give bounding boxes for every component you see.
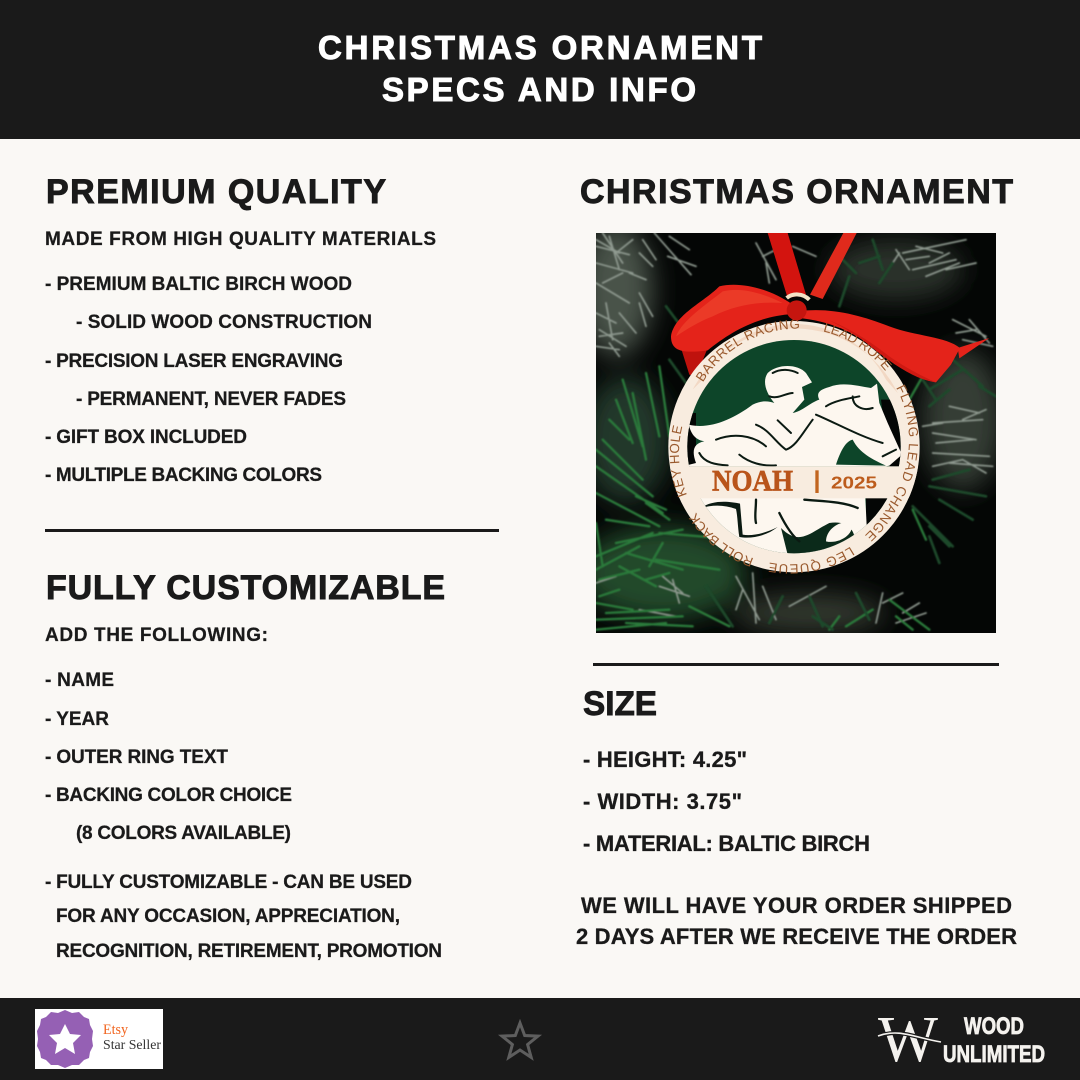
text block: occasions: - FULLY CUSTOMIZABLE - CAN BE USED: [45, 872, 412, 893]
heading: size: SIZE: [583, 685, 657, 723]
text block: occasions: RECOGNITION, RETIREMENT, PROMOTION: [56, 941, 442, 962]
heading: christmas ornament: CHRISTMAS ORNAMENT: [580, 173, 1013, 211]
list: customization options: (8 COLORS AVAILABLE): [76, 823, 291, 844]
outer ring text: KEY HOLE: [670, 425, 687, 498]
list: customization options: [45, 670, 292, 844]
list: dimensions: [583, 747, 870, 856]
outer ring text: [670, 320, 918, 574]
label: etsy: Etsy: [103, 1022, 128, 1038]
text block: occasions: FOR ANY OCCASION, APPRECIATION,: [56, 906, 400, 927]
lower body: [700, 498, 867, 554]
icon: white star: [49, 1024, 81, 1054]
list: quality features: [45, 274, 372, 486]
etsy star seller badge: [35, 1009, 163, 1069]
footer band: [0, 998, 1080, 1080]
shipping note: [576, 893, 1017, 949]
logo text: [943, 1013, 1045, 1068]
outer ring text: LEAD ROPE: [824, 323, 892, 371]
title: CHRISTMAS ORNAMENT: [318, 29, 762, 66]
engraved name and year: NOAH: [712, 465, 793, 498]
panel: fully customizable: [45, 569, 445, 962]
panel: size: [583, 685, 870, 856]
list: customization options: - YEAR: [45, 709, 109, 730]
outer ring text: FLYING LEAD CHANGE: [865, 384, 918, 542]
list: quality features: - SOLID WOOD CONSTRUCTION: [76, 312, 372, 333]
list: quality features: - PREMIUM BALTIC BIRCH WOOD: [45, 274, 352, 295]
outer ring text: BARREL RACING: [696, 320, 799, 382]
title: SPECS AND INFO: [382, 71, 696, 108]
heading: premium quality: PREMIUM QUALITY: [46, 173, 386, 211]
panel: premium quality: [45, 173, 436, 486]
logo text: WOOD: [964, 1013, 1024, 1040]
heading: fully customizable: FULLY CUSTOMIZABLE: [46, 569, 445, 607]
ornament photo: [596, 233, 996, 633]
list: customization options: - BACKING COLOR CHOICE: [45, 785, 292, 806]
intro: materials: MADE FROM HIGH QUALITY MATERIALS: [45, 229, 436, 250]
rider and horse: [683, 366, 902, 466]
ribbon back pieces: [681, 233, 857, 377]
list: customization options: - OUTER RING TEXT: [45, 747, 228, 768]
engraved name and year: 2025: [831, 472, 877, 492]
logo text: UNLIMITED: [943, 1041, 1045, 1068]
list: quality features: - PERMANENT, NEVER FADES: [76, 389, 346, 410]
list: dimensions: - MATERIAL: BALTIC BIRCH: [583, 831, 870, 856]
wood unlimited logo: [878, 1003, 1045, 1076]
intro: add the following: ADD THE FOLLOWING:: [45, 625, 268, 646]
name band: [666, 466, 923, 498]
outer ring text: LEG QUEUE: [768, 547, 854, 574]
list: quality features: - GIFT BOX INCLUDED: [45, 427, 247, 448]
list: customization options: - NAME: [45, 670, 114, 691]
icon: outline star: [502, 1023, 538, 1057]
list: quality features: - MULTIPLE BACKING COLORS: [45, 465, 322, 486]
logo mark: W: W: [878, 1003, 939, 1076]
text block: occasions: [45, 872, 442, 962]
shipping note: WE WILL HAVE YOUR ORDER SHIPPED: [581, 893, 1012, 918]
wooden ring: [668, 321, 920, 572]
horse detail cuts: [699, 370, 896, 466]
header band: [0, 0, 1080, 139]
title: [318, 29, 762, 108]
backing colour: [687, 340, 901, 554]
ribbon bow: [671, 285, 989, 382]
list: dimensions: - WIDTH: 3.75": [583, 789, 742, 814]
shipping note: 2 DAYS AFTER WE RECEIVE THE ORDER: [576, 924, 1017, 949]
list: quality features: - PRECISION LASER ENGRAVING: [45, 351, 343, 372]
engraved name and year: [712, 470, 876, 493]
outer ring text: ROLL BACK: [688, 512, 753, 567]
list: dimensions: - HEIGHT: 4.25": [583, 747, 747, 772]
label: star seller: Star Seller: [103, 1038, 161, 1053]
icon: purple rosette: [37, 1010, 93, 1068]
